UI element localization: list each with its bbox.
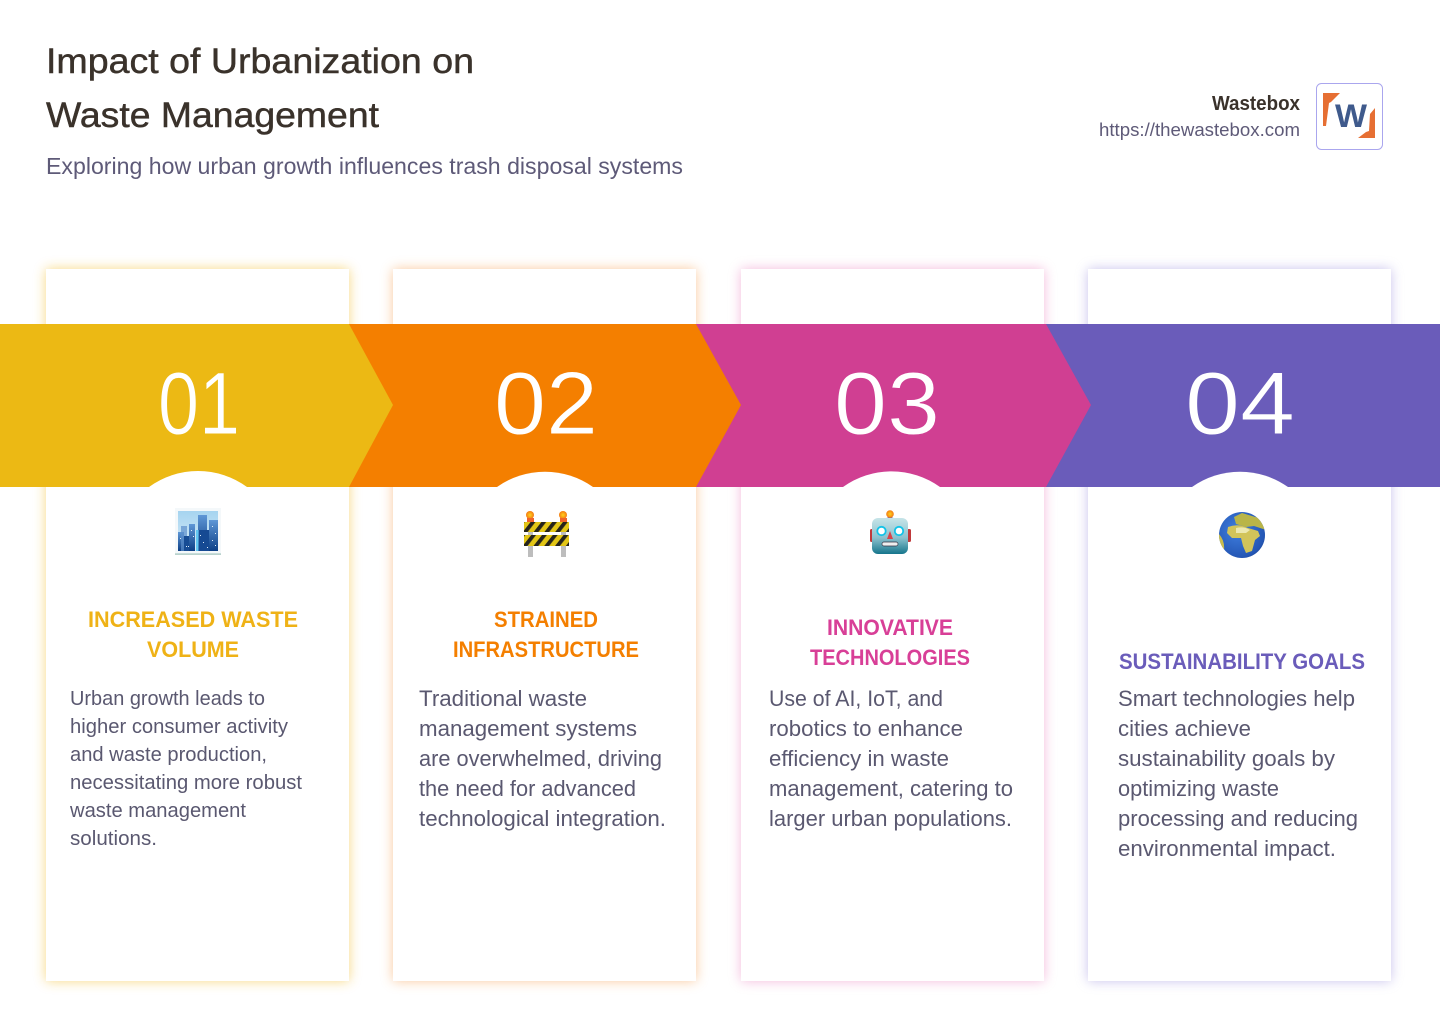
- arrow: step 01: 01: [158, 353, 240, 453]
- body text: Traditional waste: [419, 686, 587, 711]
- panel: strained infrastructure: [393, 269, 696, 981]
- heading: innovative technologies: [810, 615, 970, 670]
- body text: management systems: [419, 716, 637, 741]
- body text: are overwhelmed, driving: [419, 746, 662, 771]
- body text: robotics to enhance: [769, 716, 963, 741]
- body text: [769, 686, 1013, 831]
- title: Impact of Urbanization on: [46, 42, 474, 81]
- body text: and waste production,: [70, 744, 267, 766]
- subtitle: Exploring how urban growth influences trash disposal systems: [46, 153, 683, 179]
- body text: [69, 688, 302, 850]
- brand name and URL: Wastebox: [1212, 93, 1300, 115]
- body text: solutions.: [70, 828, 157, 850]
- brand name and URL: [1099, 93, 1300, 140]
- body text: technological integration.: [419, 806, 666, 831]
- arrow: step 04: 04: [1185, 353, 1295, 453]
- brand name and URL: https://thewastebox.com: [1099, 119, 1300, 140]
- panel: sustainability goals: [1088, 269, 1391, 981]
- body text: larger urban populations.: [769, 806, 1012, 831]
- heading: sustainability goals: SUSTAINABILITY GOALS: [1119, 649, 1365, 674]
- heading: increased waste volume: [88, 607, 298, 662]
- heading: strained infrastructure: INFRASTRUCTURE: [453, 637, 639, 662]
- icon: cityscape: [175, 508, 221, 555]
- body text: management, catering to: [769, 776, 1013, 801]
- body text: efficiency in waste: [769, 746, 949, 771]
- arrow: step 01: [0, 324, 393, 487]
- heading: innovative technologies: TECHNOLOGIES: [810, 645, 970, 670]
- body text: Use of AI, IoT, and: [769, 686, 943, 711]
- heading: increased waste volume: VOLUME: [147, 637, 239, 662]
- body text: processing and reducing: [1118, 806, 1358, 831]
- arrow: step 03: [696, 324, 1091, 487]
- icon: Wastebox logo: W: [1335, 98, 1368, 134]
- heading: strained infrastructure: [453, 607, 639, 662]
- body text: cities achieve: [1118, 716, 1251, 741]
- panel: increased waste volume: [46, 269, 349, 981]
- body text: Smart technologies help: [1118, 686, 1355, 711]
- body text: necessitating more robust: [70, 772, 302, 794]
- arrow: step 03: 03: [834, 353, 940, 453]
- icon: globe: [1218, 512, 1266, 558]
- heading: increased waste volume: INCREASED WASTE: [88, 607, 298, 632]
- icon: construction barrier: [524, 511, 569, 557]
- body text: waste management: [69, 800, 246, 822]
- heading: innovative technologies: INNOVATIVE: [827, 615, 953, 640]
- body text: the need for advanced: [419, 776, 636, 801]
- body text: sustainability goals by: [1118, 746, 1335, 771]
- arrow: step 04: [1046, 324, 1440, 487]
- panel: innovative technologies: [741, 269, 1044, 981]
- body text: higher consumer activity: [70, 716, 288, 738]
- arrow: step 02: [349, 324, 741, 487]
- body text: [1118, 686, 1358, 861]
- heading: strained infrastructure: STRAINED: [494, 607, 598, 632]
- body text: optimizing waste: [1118, 776, 1279, 801]
- arrow: step 02: 02: [494, 353, 598, 453]
- icon: robot: [870, 510, 911, 554]
- body text: [419, 686, 666, 831]
- title: Waste Management: [46, 96, 379, 135]
- title: [46, 42, 474, 135]
- body text: Urban growth leads to: [70, 688, 265, 710]
- body text: environmental impact.: [1118, 836, 1336, 861]
- icon: Wastebox logo: [1316, 84, 1382, 150]
